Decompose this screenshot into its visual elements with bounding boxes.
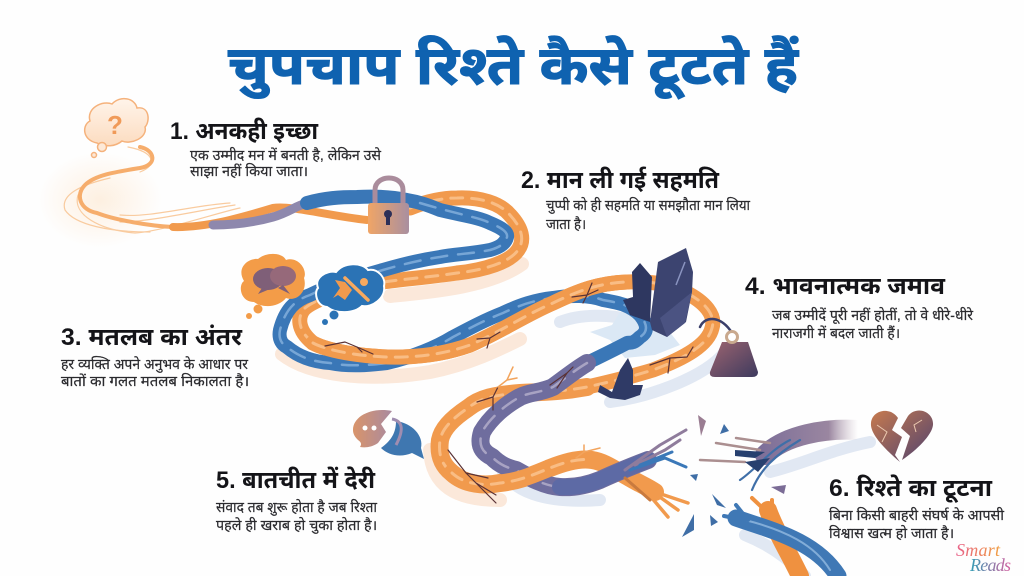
step 3: orange thought cloud bbox=[241, 254, 305, 319]
step 3 text: हर व्यक्ति अपने अनुभव के आधार पर bbox=[61, 355, 248, 374]
step 3 text: 3. मतलब का अंतर bbox=[61, 324, 242, 351]
rope: orange overlaps bbox=[313, 282, 627, 484]
frayed right rope piece bbox=[700, 430, 858, 490]
step 2 text: 2. मान ली गई सहमति bbox=[521, 166, 720, 194]
step 1: thought cloud with question mark bbox=[85, 99, 148, 158]
rope shadows: cool bbox=[500, 316, 870, 576]
step 4 text bbox=[745, 273, 973, 341]
rope: orange strand bbox=[300, 198, 713, 492]
step 4 text: 4. भावनात्मक जमाव bbox=[745, 273, 946, 300]
step 2 text: जाता है। bbox=[546, 216, 586, 232]
logo: Smart Reads bbox=[956, 540, 1011, 575]
step 6 text: विश्वास खत्म हो जाता है। bbox=[829, 525, 954, 541]
step 3 text bbox=[61, 324, 249, 389]
step 4: hanging weight bbox=[700, 319, 758, 377]
ice crystals small bbox=[598, 358, 643, 400]
bottom rope piece bbox=[724, 498, 838, 576]
step 2 text: चुप्पी को ही सहमति या समझौता मान लिया bbox=[546, 197, 750, 215]
step 1 text bbox=[170, 117, 382, 179]
logo: Smart Reads: Reads bbox=[969, 555, 1011, 575]
step 6: broken heart bbox=[871, 411, 933, 462]
crack branches in orange bbox=[498, 367, 600, 458]
step 3: blue thought cloud bbox=[316, 264, 384, 325]
step 1 text: 1. अनकही इच्छा bbox=[170, 117, 319, 145]
step 6 text bbox=[829, 474, 1004, 541]
step 1: glow bbox=[38, 152, 162, 248]
step 5: broken speech bubbles bbox=[353, 410, 424, 459]
step 4 text: नाराजगी में बदल जाती हैं। bbox=[772, 325, 900, 341]
step 2: padlock bbox=[368, 178, 409, 234]
step 6 text: 6. रिश्ते का टूटना bbox=[829, 474, 993, 503]
logo: Smart Reads: Smart bbox=[956, 540, 1001, 560]
step 1: fine threads bbox=[64, 147, 240, 233]
ice crystals large bbox=[623, 248, 693, 337]
step 4 text: जब उम्मीदें पूरी नहीं होतीं, तो वे धीरे-धीरे bbox=[772, 306, 973, 325]
shards bbox=[682, 415, 786, 537]
step 6 text: बिना किसी बाहरी संघर्ष के आपसी bbox=[829, 506, 1004, 523]
step 5 text: 5. बातचीत में देरी bbox=[216, 466, 376, 494]
step 5 text bbox=[216, 466, 377, 535]
rope: blue strand bbox=[213, 197, 648, 487]
step 1 text: एक उम्मीद मन में बनती है, लेकिन उसे bbox=[190, 146, 382, 163]
step 5 text: पहले ही खराब हो चुका होता है। bbox=[216, 516, 377, 535]
rope: purple overlap at lower bend bbox=[560, 460, 648, 487]
title: चुपचाप रिश्ते कैसे टूटते हैं bbox=[228, 35, 800, 100]
rope shadows: warm bbox=[282, 264, 522, 500]
step 5 text: संवाद तब शुरू होता है जब रिश्ता bbox=[216, 499, 377, 517]
ice patch bbox=[590, 312, 680, 358]
step 3 text: बातों का गलत मतलब निकालता है। bbox=[61, 373, 249, 389]
step 1 text: साझा नहीं किया जाता। bbox=[190, 163, 308, 179]
step 1: thought cloud with question mark: ? bbox=[107, 110, 123, 140]
frayed left rope end bbox=[625, 430, 688, 517]
cracks bbox=[325, 283, 693, 503]
step 2 text bbox=[521, 166, 750, 232]
step 1: orange thread bbox=[80, 147, 367, 227]
